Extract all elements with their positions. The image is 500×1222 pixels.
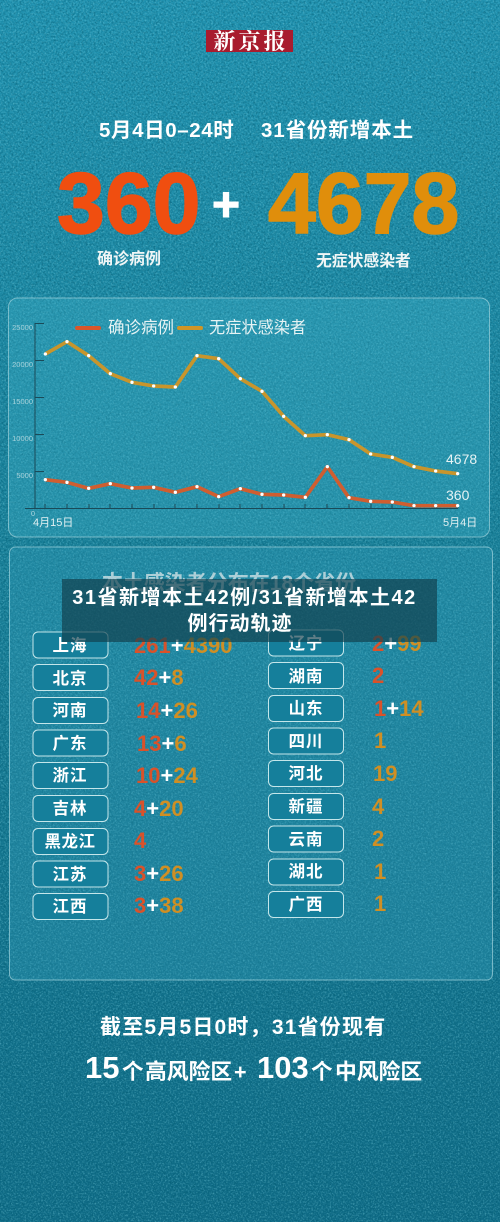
heading: date and scope — [99, 118, 414, 142]
row: 上海: 上海 — [52, 636, 88, 655]
row: 广东: 13+6 — [137, 731, 187, 756]
row: 湖南: 湖南 — [288, 667, 324, 686]
axis labels — [12, 323, 477, 529]
row: 河北: 河北 — [288, 764, 324, 783]
row: 湖北: 湖北 — [288, 862, 324, 881]
panel heading: 本土感染者分布在18个省份 — [102, 571, 356, 595]
row: 黑龙江: 4 — [134, 828, 147, 853]
row: 河北 — [268, 760, 397, 786]
footer: risk area counts: 103 — [257, 1050, 309, 1085]
heading: date and scope: 31省份新增本土 — [261, 118, 414, 142]
axis labels: 10000 — [12, 434, 33, 443]
footer: risk area counts: 个 — [311, 1060, 333, 1084]
row: 湖南: 2 — [372, 663, 384, 688]
big number: asymptomatic cases: 无症状感染者 — [316, 251, 411, 270]
row: 新疆: 新疆 — [288, 796, 324, 816]
panel: trend line chart — [8, 298, 490, 537]
row: 上海 — [33, 632, 233, 658]
footer: risk area counts — [85, 1050, 422, 1085]
row: 吉林 — [33, 796, 184, 822]
row: 吉林: 4+20 — [134, 796, 184, 821]
row: 浙江: 10+24 — [136, 763, 199, 788]
axis labels: 0 — [31, 509, 35, 518]
row: 江苏: 江苏 — [52, 865, 88, 884]
row: 河南: 14+26 — [136, 698, 198, 723]
legend — [77, 318, 306, 337]
row: 北京 — [33, 664, 184, 690]
logo: 新京报: 新京报 — [213, 29, 289, 54]
panel: provincial distribution — [10, 547, 492, 980]
row: 新疆: 4 — [372, 794, 385, 819]
big number: asymptomatic cases: 4678 — [268, 156, 459, 252]
row: 辽宁: 2+99 — [372, 631, 422, 656]
row: 湖南 — [268, 662, 384, 688]
legend: 确诊病例 — [108, 318, 174, 337]
row: 新疆 — [268, 794, 385, 820]
end value labels: 360 — [446, 487, 470, 503]
row: 广东: 广东 — [52, 733, 88, 753]
row: 山东: 山东 — [288, 698, 324, 718]
row: 河南 — [33, 698, 198, 724]
footer: risk area counts: 15 — [85, 1050, 119, 1085]
row: 吉林: 吉林 — [52, 799, 88, 818]
row: 广西 — [268, 891, 386, 918]
row: 江苏 — [33, 861, 184, 887]
plus sign: + — [212, 179, 240, 232]
footer: as-of statement: 截至5月5日0时，31省份现有 — [100, 1016, 386, 1039]
footer: risk area counts: 高风险区 — [145, 1059, 232, 1084]
row: 江西: 江西 — [52, 897, 88, 916]
row: 河北: 19 — [373, 761, 397, 786]
footer: risk area counts: + — [234, 1060, 247, 1084]
row: 浙江: 浙江 — [52, 766, 88, 785]
end value labels: 4678 — [446, 451, 477, 467]
left column: provinces — [33, 632, 233, 920]
legend: 无症状感染者 — [209, 319, 306, 337]
row: 江西 — [33, 893, 184, 920]
line: asymptomatic — [44, 340, 459, 475]
row: 广西: 广西 — [288, 895, 324, 914]
row: 北京: 北京 — [52, 668, 88, 688]
row: 辽宁 — [268, 630, 422, 656]
row: 云南: 云南 — [288, 830, 324, 849]
big number: confirmed cases: 确诊病例 — [97, 249, 161, 268]
footer: risk area counts: 个 — [122, 1060, 144, 1084]
axis labels: 5月4日 — [443, 517, 477, 529]
line: confirmed — [44, 465, 459, 507]
row: 四川: 四川 — [288, 733, 324, 751]
row: 广东 — [33, 730, 187, 756]
row: 四川 — [268, 728, 386, 754]
big number: confirmed cases: 360 — [57, 156, 200, 252]
row: 湖北: 1 — [374, 859, 386, 884]
chart axes — [25, 323, 458, 508]
row: 湖北 — [268, 859, 386, 885]
row: 江西: 3+38 — [134, 893, 184, 918]
row: 山东 — [268, 696, 424, 722]
headline overlay banner: 31省新增本土42例/31省新增本土42 — [72, 586, 417, 609]
row: 黑龙江: 黑龙江 — [44, 832, 96, 851]
footer: risk area counts: 中风险区 — [335, 1059, 422, 1084]
row: 云南 — [268, 826, 384, 852]
row: 浙江 — [33, 762, 199, 788]
row: 广西: 1 — [374, 891, 386, 916]
row: 上海: 261+4390 — [134, 633, 233, 658]
row: 辽宁: 辽宁 — [288, 633, 324, 653]
row: 河南: 河南 — [52, 701, 88, 720]
row: 云南: 2 — [372, 826, 384, 851]
axis labels: 25000 — [12, 323, 33, 332]
axis labels: 5000 — [16, 471, 33, 480]
heading: date and scope: 5月4日0–24时 — [99, 119, 234, 142]
row: 北京: 42+8 — [134, 665, 184, 690]
axis labels: 20000 — [12, 360, 33, 369]
axis labels: 4月15日 — [33, 517, 73, 529]
right column: provinces — [268, 630, 424, 918]
row: 四川: 1 — [374, 728, 386, 753]
row: 山东: 1+14 — [374, 696, 424, 721]
headline overlay banner: 例行动轨迹 — [188, 612, 292, 635]
row: 江苏: 3+26 — [134, 861, 184, 886]
axis labels: 15000 — [12, 397, 33, 406]
end value labels — [446, 451, 477, 503]
headline overlay banner — [62, 579, 437, 642]
row: 黑龙江 — [33, 828, 147, 854]
